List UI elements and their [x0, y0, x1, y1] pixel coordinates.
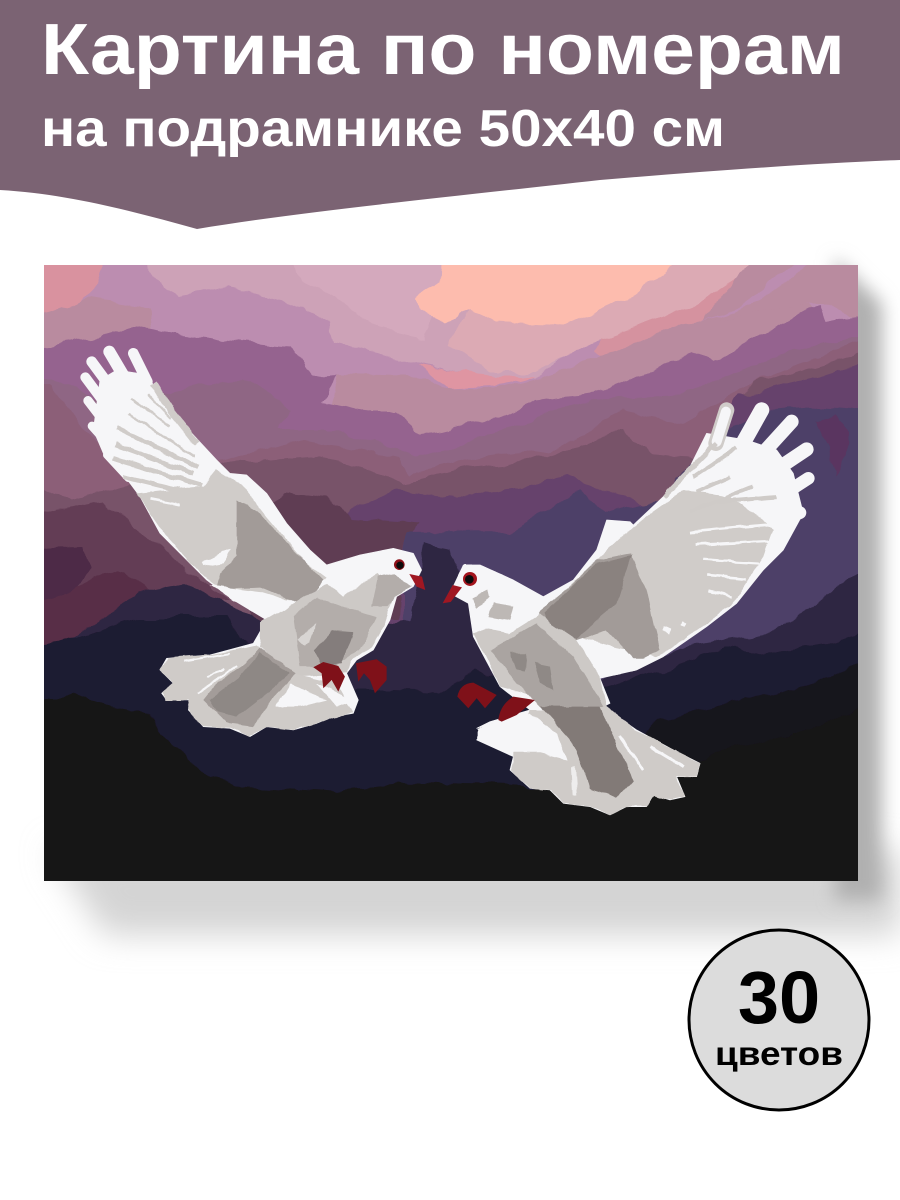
left dove white silhouette	[85, 352, 422, 737]
left dove body	[260, 572, 395, 677]
left dove eye	[394, 559, 405, 570]
canvas shadow	[50, 258, 900, 935]
right dove tail	[510, 707, 700, 815]
subtitle: на подрамнике 50х40 см	[41, 100, 725, 158]
right dove wing shading	[450, 443, 783, 815]
dove: right	[443, 410, 808, 815]
right dove feet	[457, 683, 535, 722]
badge: 30 colours	[689, 930, 869, 1110]
sky and mountain layers	[44, 265, 858, 881]
dove: left	[85, 352, 425, 737]
left dove feet	[313, 659, 387, 693]
right dove beak	[443, 585, 462, 603]
right dove body	[473, 613, 607, 723]
left dove beak	[409, 574, 425, 590]
right dove eye	[463, 572, 477, 586]
badge label: цветов	[715, 1035, 843, 1072]
left dove tail	[160, 645, 353, 737]
left dove wing shading	[113, 383, 418, 737]
right dove white silhouette	[450, 410, 808, 815]
right dove head	[458, 564, 540, 634]
top banner	[0, 0, 900, 229]
title: Картина по номерам	[41, 10, 845, 90]
painting: two doves at dusk	[44, 265, 858, 881]
badge number: 30	[738, 956, 820, 1039]
